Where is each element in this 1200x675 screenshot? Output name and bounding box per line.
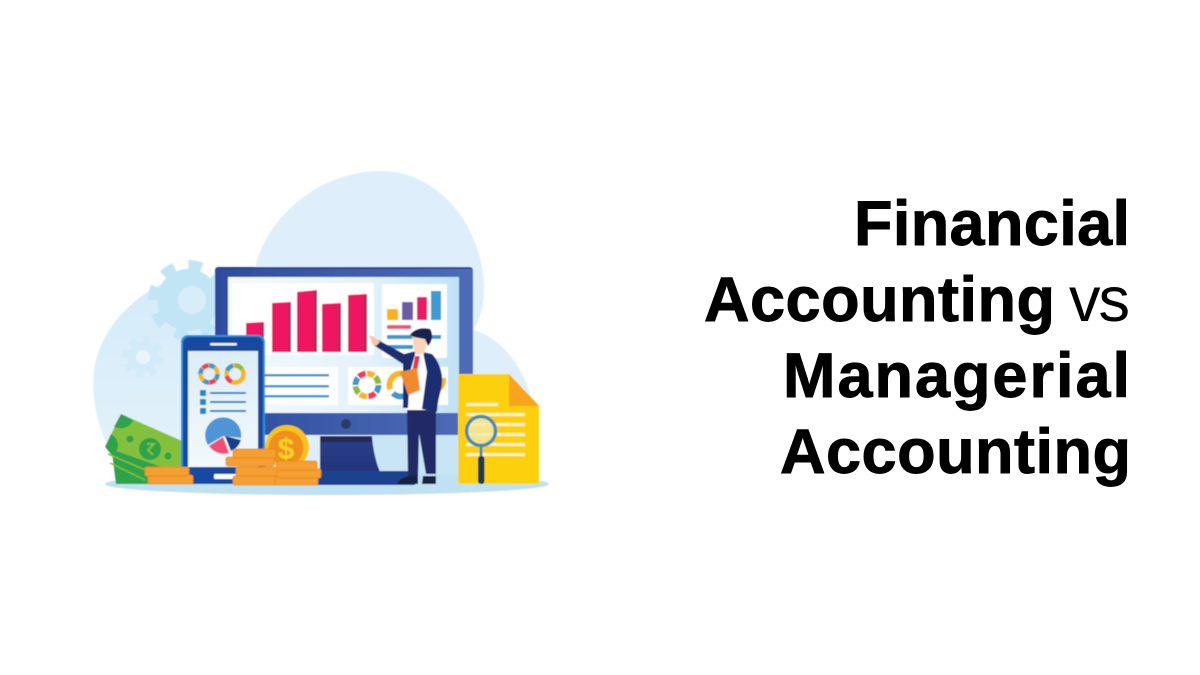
title line: Accounting vs: Accounting [704, 265, 1055, 335]
folder [400, 368, 420, 395]
neck and head [412, 336, 426, 354]
donut charts on phone [200, 366, 244, 382]
coin stack: right [275, 461, 321, 485]
title [704, 189, 1131, 487]
businessman [369, 328, 442, 484]
phone screen [188, 351, 258, 467]
icon: large gear [153, 265, 223, 335]
phone body [181, 335, 265, 484]
pie chart on phone [205, 417, 241, 454]
title line: Accounting vs: vs [1069, 265, 1130, 335]
shoes [397, 476, 418, 484]
monitor screen [228, 277, 459, 413]
list on phone [200, 390, 246, 414]
monitor bezel [215, 267, 473, 435]
panel: donut charts [348, 367, 448, 405]
title line: Accounting: Accounting [780, 417, 1131, 487]
panel: small chart [382, 284, 447, 358]
floor ellipse [105, 473, 549, 495]
document with magnifier [458, 374, 539, 484]
icon: dollar coin [265, 425, 309, 469]
illustration: accounting dashboard scene [93, 171, 549, 495]
title line: Managerial: Managerial [783, 341, 1130, 411]
light blue ground area [372, 432, 462, 482]
icon: dollar coin: $ [278, 433, 295, 466]
document lines [466, 403, 525, 456]
coin stack: middle [226, 449, 278, 485]
panel: bar chart [232, 283, 374, 355]
hand [369, 335, 380, 346]
icon: small gear [125, 339, 161, 375]
background cloud shapes [93, 171, 532, 484]
tie [412, 356, 420, 376]
icon: banknotes [105, 414, 182, 484]
monitor stand [310, 436, 415, 485]
power button [341, 419, 351, 429]
phone [181, 335, 265, 484]
folded corner [509, 374, 539, 406]
icon: magnifier [466, 416, 496, 484]
jacket [372, 340, 416, 408]
coin stack: left [145, 467, 193, 484]
monitor [215, 267, 473, 485]
legs [407, 408, 436, 477]
document page [458, 374, 539, 484]
shirt [405, 352, 429, 410]
hair [410, 328, 432, 346]
title line: Financial: Financial [854, 189, 1130, 259]
panel: text lines [232, 367, 338, 405]
